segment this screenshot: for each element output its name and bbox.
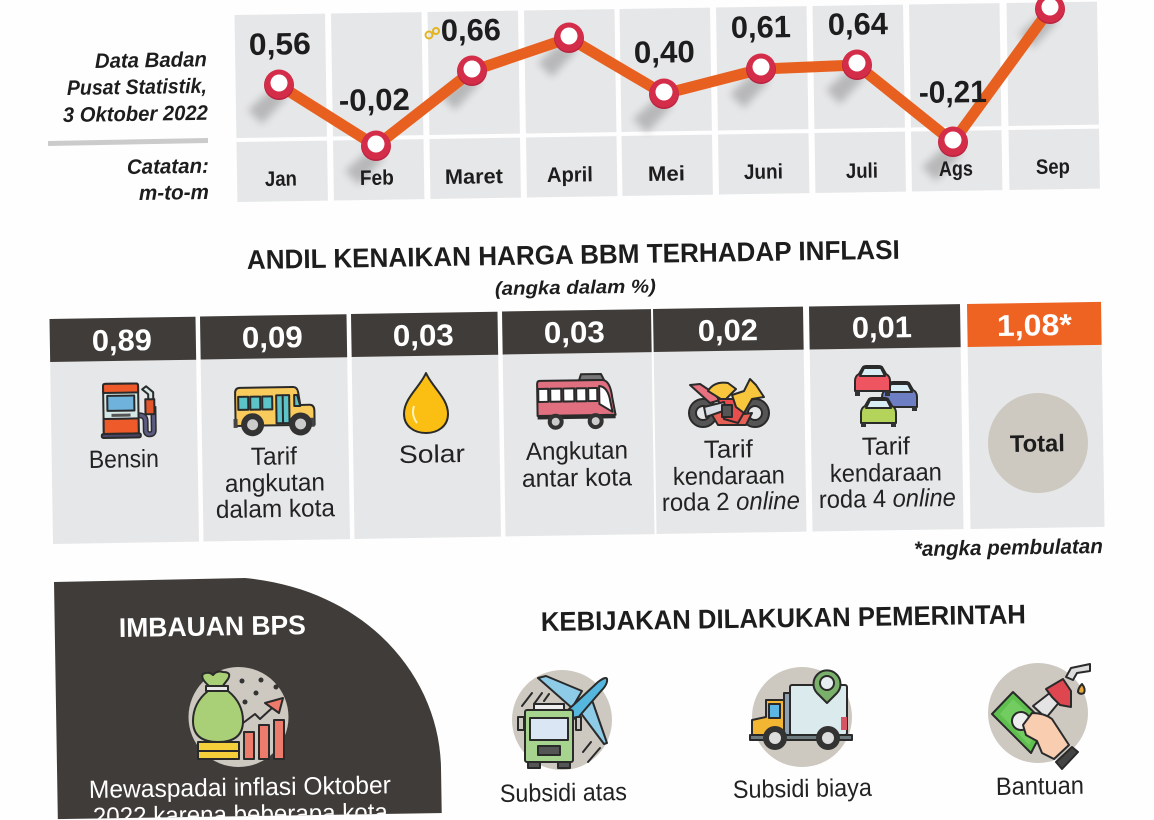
appeal text: Mewaspadai inflasi Oktober [89, 771, 391, 804]
icon: money bag and rising chart [188, 667, 288, 767]
icon: hand with cash and fuel nozzle [988, 663, 1090, 769]
line chart: monthly inflation: Juli [846, 159, 878, 183]
chart source note [48, 48, 209, 205]
line chart: monthly inflation: Sep [1036, 155, 1070, 179]
panel: angkutan antar kota [502, 309, 655, 536]
policy: subsidi atas: Subsidi atas [500, 778, 627, 808]
panel: tarif kendaraan roda 4 online: roda 4 online [819, 484, 956, 514]
line chart: monthly inflation: 0,64 [828, 6, 889, 42]
chart source note: 3 Oktober 2022 [63, 102, 208, 127]
policy: subsidi biaya: Subsidi biaya [733, 774, 872, 804]
chart source note: Catatan: [127, 155, 209, 179]
panel: tarif kendaraan roda 4 online: 0,01 [852, 311, 912, 345]
panel: tarif kendaraan roda 2 online: 0,02 [698, 314, 758, 348]
panel heading: IMBAUAN BPS [119, 610, 306, 643]
line chart: monthly inflation: Ags [939, 157, 973, 181]
panel: solar [351, 312, 501, 539]
panel: imbauan BPS [54, 578, 442, 820]
line chart: monthly inflation: 0,61 [731, 9, 791, 45]
line chart: monthly inflation [234, 0, 1100, 202]
icon: intercity bus [537, 374, 616, 430]
appeal text [90, 776, 390, 818]
panel: tarif kendaraan roda 4 online: Tarif [862, 432, 910, 461]
policy: subsidi biaya [733, 667, 872, 804]
heading: government policy: KEBIJAKAN DILAKUKAN PEMERINTAH [541, 599, 1026, 637]
line chart: monthly inflation: 0,40 [634, 34, 695, 70]
policy: subsidi atas [500, 670, 627, 808]
chart source note: Pusat Statistik, [67, 75, 207, 100]
panel: tarif kendaraan roda 2 online: Tarif [704, 435, 753, 464]
panel: bensin: Bensin [89, 445, 159, 474]
icon: motorbike [689, 379, 769, 427]
panel: solar: 0,03 [393, 319, 454, 353]
panel: tarif kendaraan roda 2 online: kendaraan [673, 461, 785, 491]
panel: total [967, 302, 1105, 529]
panel: bensin [50, 317, 199, 544]
panel: angkutan antar kota: antar kota [522, 463, 632, 493]
icon: oil drop [404, 373, 448, 433]
line chart: monthly inflation: Mei [648, 162, 685, 186]
line chart: monthly inflation: Juni [744, 160, 783, 184]
icon: delivery truck [750, 667, 852, 767]
panel: tarif angkutan dalam kota: 0,09 [242, 321, 303, 355]
icon: school bus [233, 387, 315, 436]
panel: bensin: 0,89 [92, 324, 152, 358]
panel: total: 1,08* [997, 309, 1072, 343]
line chart: monthly inflation: Jan [265, 167, 297, 191]
subheading: (angka dalam %) [495, 276, 656, 300]
panel: tarif angkutan dalam kota: dalam kota [216, 494, 335, 524]
heading: fuel price contribution: ANDIL KENAIKAN HARGA BBM TERHADAP INFLASI [247, 235, 900, 275]
line chart: monthly inflation: April [547, 163, 593, 187]
footnote: *angka pembulatan [914, 535, 1103, 561]
panel: tarif angkutan dalam kota: Tarif [251, 442, 297, 471]
chart source note: Data Badan [95, 48, 207, 73]
icon: three cars [855, 366, 917, 427]
panel: tarif angkutan dalam kota [200, 314, 350, 541]
panel: tarif kendaraan roda 2 online [653, 307, 807, 534]
line chart: monthly inflation: Maret [445, 165, 503, 189]
policy: bantuan: Bantuan [996, 772, 1084, 801]
panel: tarif kendaraan roda 4 online: kendaraan [830, 458, 942, 488]
panel: tarif angkutan dalam kota: angkutan [225, 468, 325, 498]
chart source note: m-to-m [139, 181, 209, 205]
panel: tarif kendaraan roda 4 online [809, 304, 964, 531]
icon: fuel pump [101, 383, 155, 438]
line chart: monthly inflation: Feb [360, 166, 394, 190]
line chart: monthly inflation: -0,21 [919, 74, 987, 110]
icon: bus and plane [512, 670, 612, 770]
panel: solar: Solar [399, 440, 465, 469]
panel: angkutan antar kota: Angkutan [526, 436, 628, 466]
panel: tarif kendaraan roda 2 online: roda 2 online [662, 487, 800, 517]
panel: angkutan antar kota: 0,03 [544, 316, 605, 350]
policy: bantuan [988, 663, 1090, 801]
panel: total: Total [1010, 430, 1065, 458]
line chart: monthly inflation: 0,56 [249, 26, 311, 62]
line chart: monthly inflation: -0,02 [339, 82, 410, 118]
line chart: monthly inflation: 0,66 [441, 12, 501, 48]
